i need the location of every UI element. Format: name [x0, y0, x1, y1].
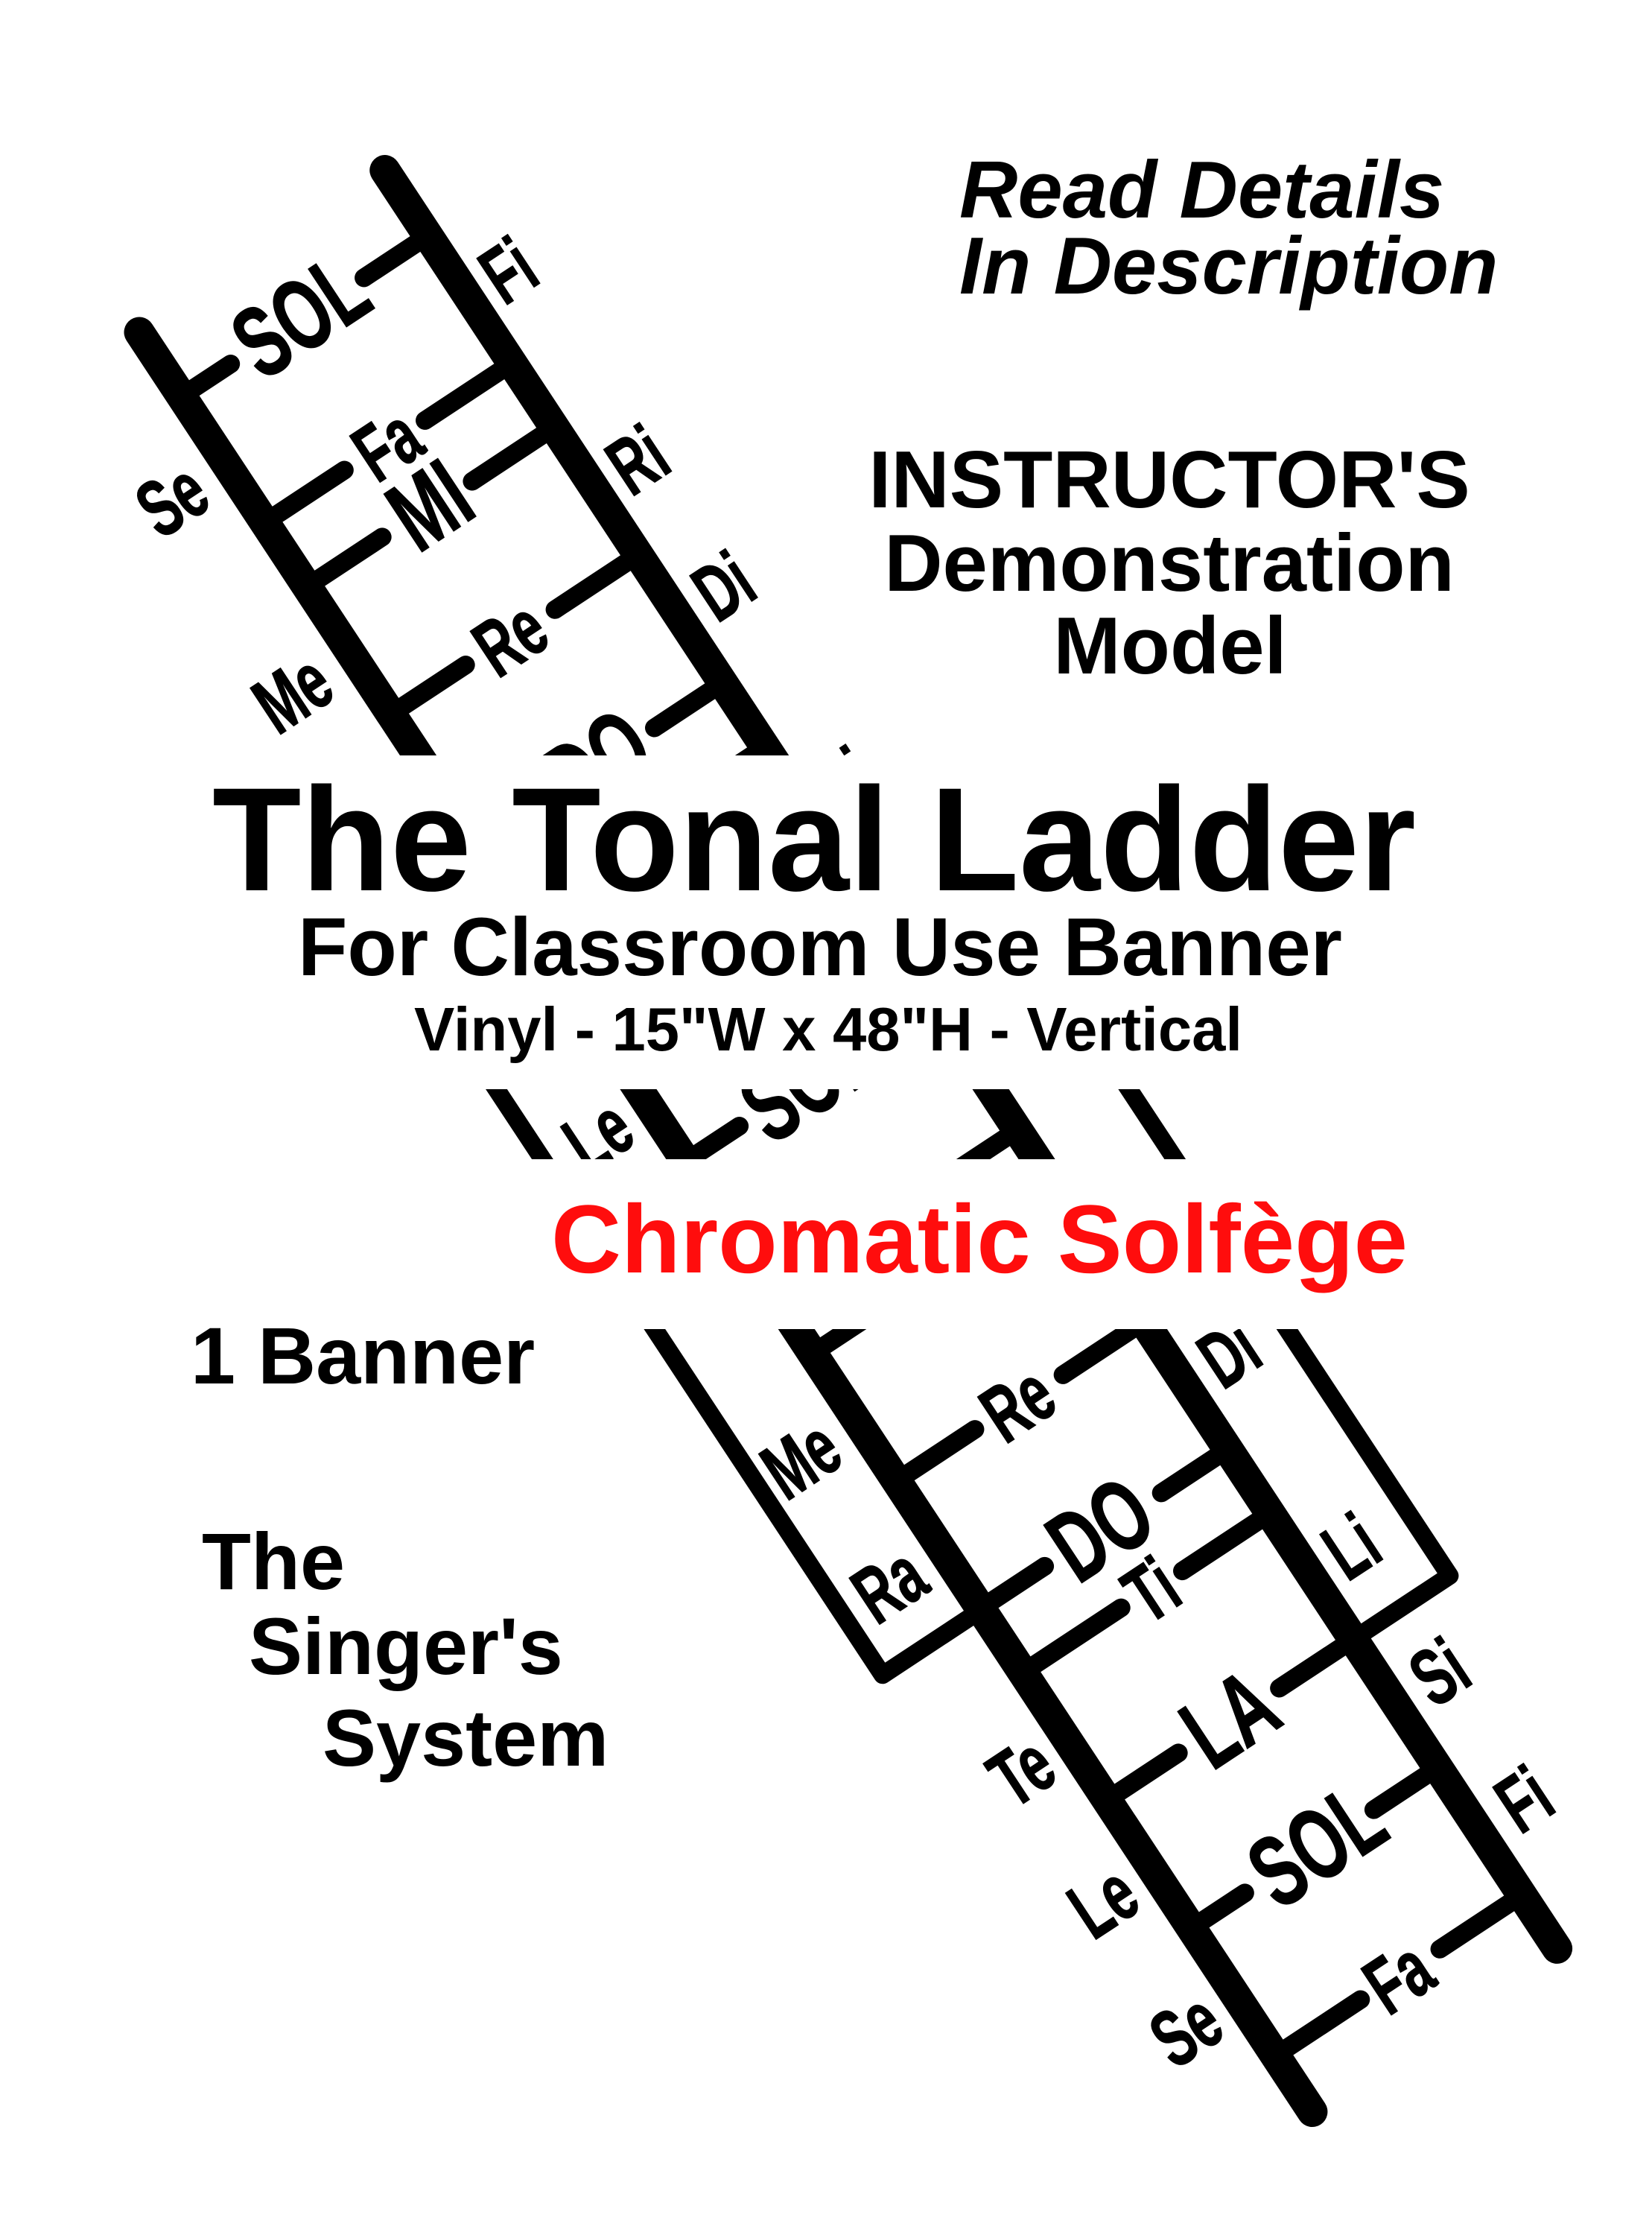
- rung: DO: [445, 633, 752, 890]
- rung: LA: LA: [657, 881, 792, 1024]
- rung: SOL: [1160, 1719, 1468, 1975]
- title band background: [0, 755, 1652, 1089]
- system name: System: [323, 1693, 609, 1783]
- flat labels left of ladder: Me: [238, 636, 348, 751]
- rung: Ti: Ti: [1108, 1541, 1195, 1640]
- system name: Singer's: [249, 1601, 563, 1691]
- heading: instructor's demonstration model: Model: [1053, 600, 1287, 691]
- sharp labels right of ladder: Si: [1395, 1623, 1485, 1724]
- note: read details: Read Details: [959, 145, 1444, 235]
- red heading: chromatic solfege: Chromatic Solfège: [551, 1185, 1408, 1293]
- rung: DO: DO: [525, 687, 670, 836]
- rung: Fa: Fa: [1349, 1924, 1449, 2032]
- quantity note: 1 Banner: [191, 1310, 535, 1401]
- right rail: [385, 171, 1557, 1948]
- rung: SOL: SOL: [721, 995, 897, 1164]
- rung: SOL: [150, 186, 457, 442]
- rung: MI: MI: [874, 1205, 997, 1340]
- rung: Ti: [495, 709, 790, 946]
- rung: SOL: SOL: [213, 232, 389, 401]
- subtitle band background: [0, 1159, 1652, 1329]
- thin outer frame: [377, 617, 1449, 1866]
- rung: Fa: [747, 1093, 1042, 1329]
- rung: LA: [571, 825, 878, 1081]
- rung: Re: Re: [966, 1348, 1070, 1460]
- sharp labels right of ladder: Di: [678, 536, 770, 638]
- rung: MI: [781, 1144, 1089, 1401]
- flat labels left of ladder: Te: [468, 953, 565, 1059]
- sharp labels right of ladder: Di: [1184, 1302, 1276, 1406]
- sharp labels right of ladder: Si: [888, 857, 978, 959]
- rung: SOL: SOL: [1229, 1761, 1405, 1930]
- rung: Fa: [242, 326, 536, 562]
- heading: instructor's demonstration model: Demonstration: [884, 518, 1455, 608]
- rung: DO: DO: [1028, 1455, 1173, 1604]
- sharp labels right of ladder: [465, 217, 1570, 1854]
- size details: Vinyl - 15"W x 48"H - Vertical: [414, 995, 1242, 1064]
- rung: Ti: [1000, 1476, 1294, 1712]
- rung: Fa: [1253, 1859, 1547, 2096]
- heading: instructor's demonstration model: INSTRUCTOR'S: [868, 434, 1470, 524]
- rung: Ti: Ti: [603, 775, 690, 875]
- subtitle: For Classroom Use Banner: [298, 901, 1342, 993]
- rung: MI: MI: [369, 438, 492, 573]
- flat labels left of ladder: Ra: [331, 762, 437, 874]
- rung: Re: Re: [458, 583, 563, 694]
- flat labels left of ladder: Le: [1054, 1848, 1154, 1956]
- heading: instructor's demonstration model: [868, 434, 1470, 691]
- sharp labels right of ladder: Ri: [1097, 1176, 1189, 1279]
- flat labels left of ladder: [112, 443, 1239, 2093]
- rung: DO: [950, 1400, 1257, 1655]
- title: The Tonal Ladder: [212, 757, 1416, 922]
- flat labels left of ladder: Se: [630, 1209, 733, 1319]
- flat labels left of ladder: Ra: [837, 1529, 943, 1641]
- sharp labels right of ladder: Fi: [465, 221, 553, 321]
- rung: MI: [276, 378, 583, 633]
- rung: Fa: Fa: [844, 1157, 944, 1266]
- rung: Re: [874, 1284, 1169, 1521]
- system name: [202, 1516, 609, 1783]
- left rail: [139, 332, 1312, 2111]
- rung: LA: [1076, 1591, 1383, 1847]
- sharp labels right of ladder: Li: [803, 731, 891, 831]
- rung: SOL: [655, 952, 962, 1208]
- sharp labels right of ladder: Ri: [591, 409, 684, 513]
- rung: Re: [368, 517, 663, 754]
- note: read details: [959, 145, 1498, 311]
- flat labels left of ladder: Te: [973, 1719, 1070, 1825]
- sharp labels right of ladder: Li: [1308, 1497, 1396, 1597]
- flat labels left of ladder: Se: [1135, 1976, 1238, 2085]
- note: read details: In Description: [959, 221, 1498, 311]
- system name: The: [202, 1516, 345, 1606]
- sharp labels right of ladder: Fi: [970, 988, 1058, 1088]
- flat labels left of ladder: Me: [746, 1402, 857, 1517]
- flat labels left of ladder: Le: [548, 1082, 649, 1190]
- rung: Fa: Fa: [337, 390, 438, 499]
- flat labels left of ladder: Se: [121, 446, 223, 555]
- sharp labels right of ladder: Fi: [1481, 1750, 1569, 1851]
- rung: LA: LA: [1162, 1647, 1298, 1790]
